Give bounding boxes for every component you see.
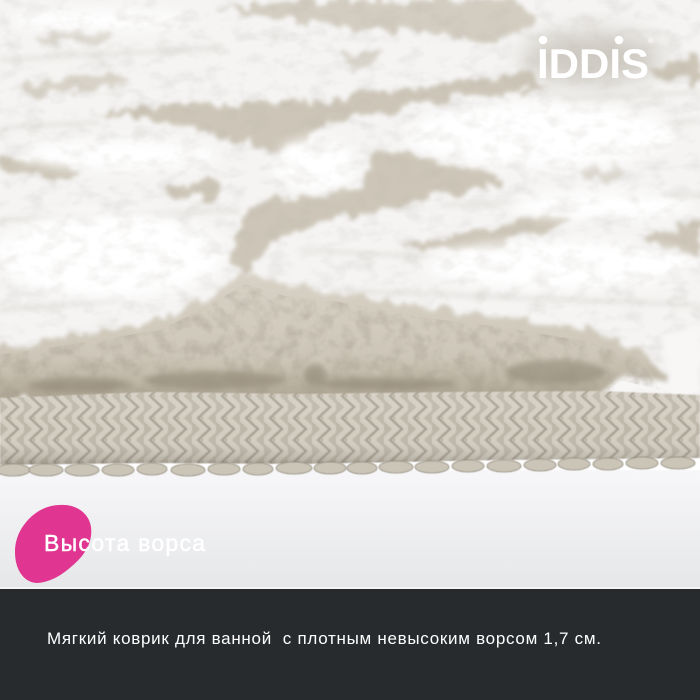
heading: Высота ворса — [44, 530, 205, 556]
logo: IDDIS: ® — [648, 36, 654, 45]
icon: logo dots — [539, 36, 623, 44]
fluffy texture on white pile — [0, 0, 700, 400]
fluffy texture on beige pile — [3, 284, 660, 390]
shadow rows in white pile — [0, 48, 700, 310]
soft shade behind logo — [522, 32, 662, 84]
floor background — [0, 470, 700, 588]
pink blob accent — [15, 505, 91, 583]
beige pattern lines in pile — [0, 0, 700, 280]
bright tufts — [0, 10, 695, 297]
beige pile area — [0, 272, 672, 402]
photo: bath mat close-up — [0, 0, 700, 402]
white corner at right — [605, 325, 700, 395]
logo: IDDIS: IDDIS — [537, 40, 649, 87]
white pile background — [0, 0, 700, 400]
pile shadows — [30, 360, 605, 392]
caption text: Мягкий коврик для ванной с плотным невысоким ворсом 1,7 см. — [47, 629, 601, 648]
mat edge: stitched bottom row — [0, 457, 695, 476]
mat edge: knitted border — [0, 391, 700, 465]
bottom caption bar — [0, 587, 700, 700]
